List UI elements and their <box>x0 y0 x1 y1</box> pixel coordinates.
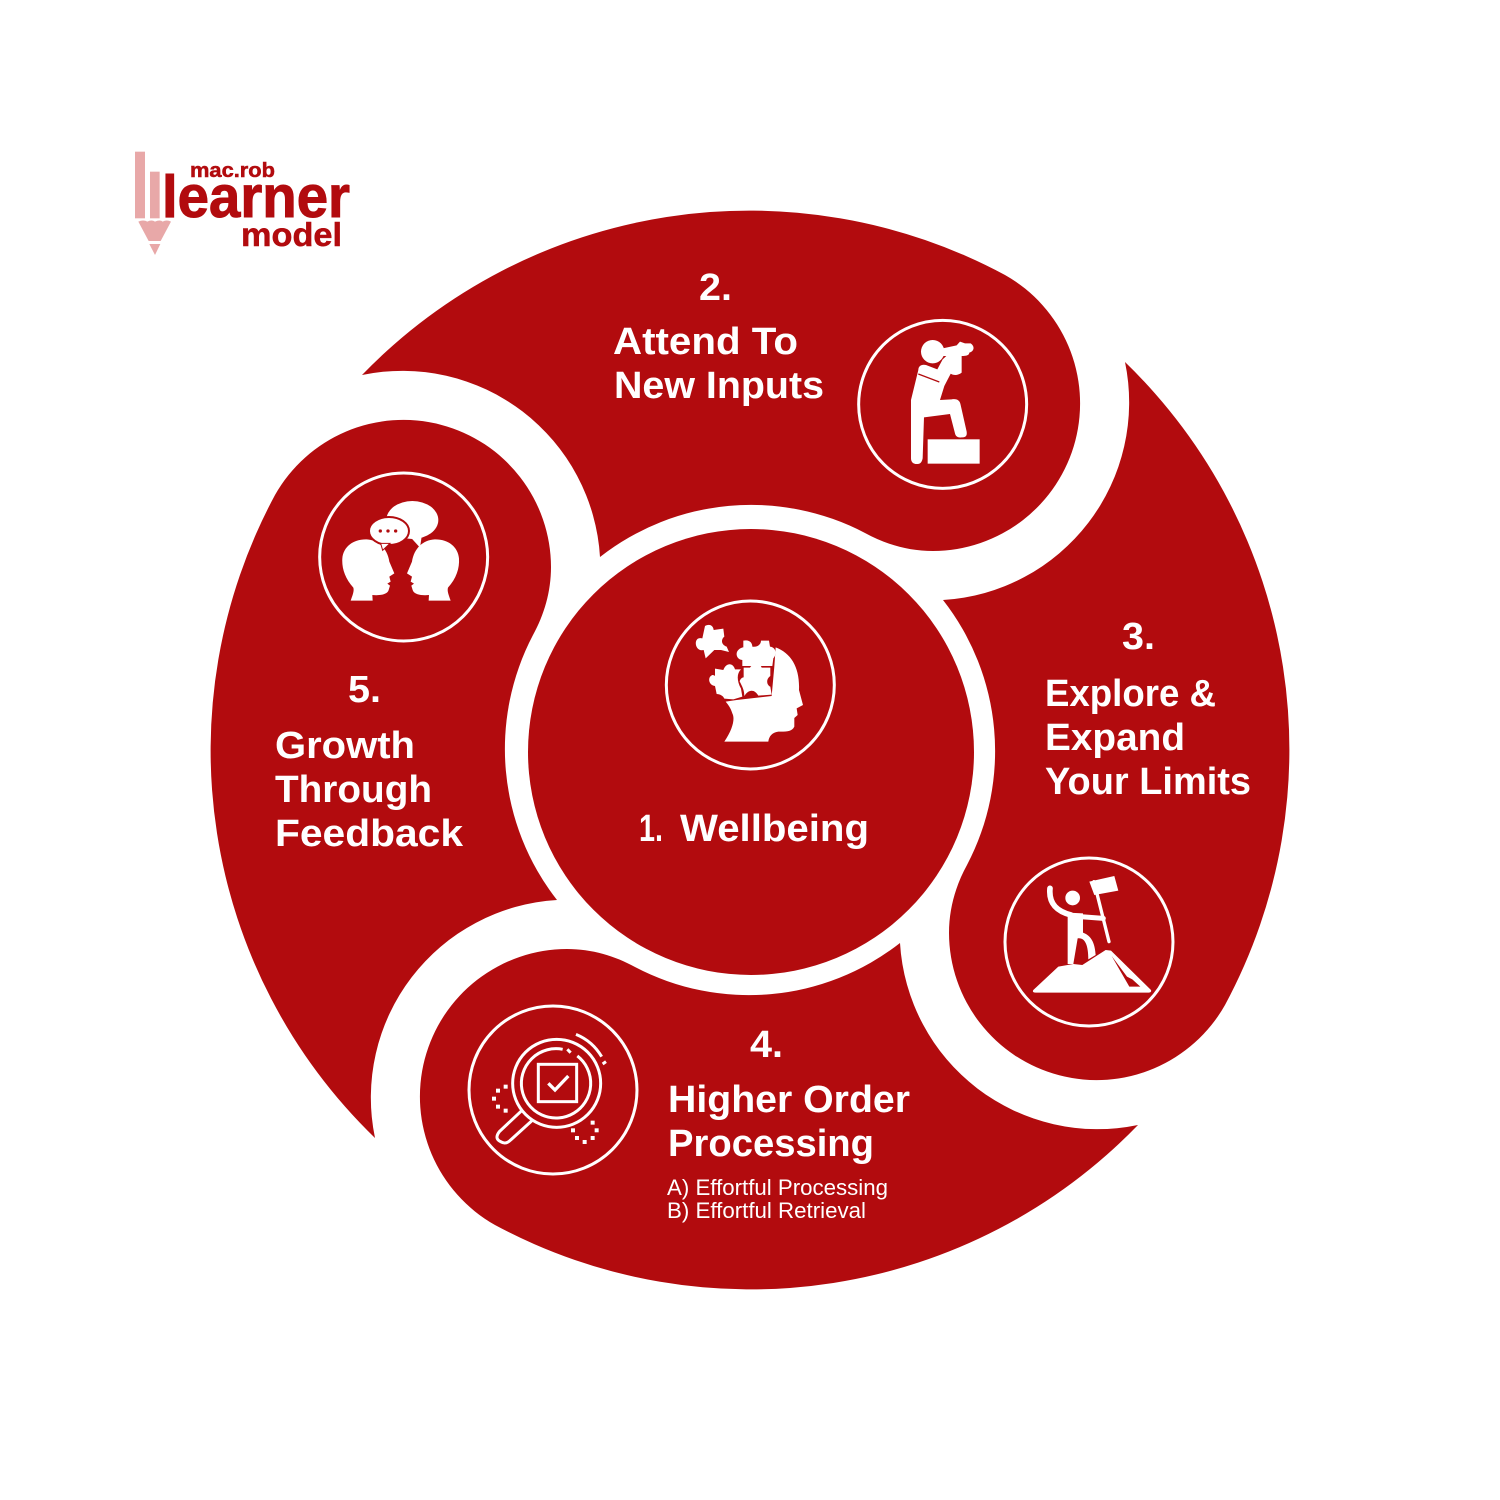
number 5: 5. <box>348 669 381 711</box>
number 1: 1. <box>639 808 663 850</box>
panel 1 shape: central circle <box>528 529 974 975</box>
panel 2 text <box>613 267 824 407</box>
panel 4 text <box>667 1024 910 1223</box>
heading feedback: Feedback <box>275 813 464 855</box>
panel 5 text <box>275 669 464 855</box>
heading explore: Explore & <box>1045 673 1216 715</box>
logo: mac.rob learner model <box>135 152 350 255</box>
logo text: model: model <box>241 216 342 253</box>
heading through: Through <box>275 769 432 811</box>
panel 4 shape: higher order processing <box>420 943 1138 1289</box>
panel 1 text: wellbeing <box>639 808 869 850</box>
logo text: mac.rob: mac.rob <box>190 160 275 182</box>
icon: two heads talking <box>320 473 488 641</box>
icon: head with puzzle pieces <box>666 601 834 769</box>
number 2: 2. <box>699 267 732 309</box>
heading growth: Growth <box>275 725 415 767</box>
icon: magnifying glass with checkbox <box>469 1006 637 1174</box>
subitem effortful processing: A) Effortful Processing <box>667 1175 888 1200</box>
number 3: 3. <box>1122 616 1155 658</box>
panel 2 shape: attend to new inputs <box>362 211 1080 557</box>
panel 5 shape: growth through feedback <box>211 420 557 1138</box>
logo text: learner: learner <box>162 164 350 230</box>
number 4: 4. <box>750 1024 783 1066</box>
logo pencil icon <box>135 152 171 255</box>
heading processing: Processing <box>668 1123 874 1165</box>
heading your limits: Your Limits <box>1045 761 1251 803</box>
icon: person with binoculars <box>859 320 1027 488</box>
subitem effortful retrieval: B) Effortful Retrieval <box>667 1198 866 1223</box>
panel 3 text <box>1045 616 1251 803</box>
heading wellbeing: Wellbeing <box>680 808 869 850</box>
heading attend to: Attend To <box>613 321 798 363</box>
panel 3 shape: explore and expand <box>943 362 1289 1080</box>
icon: climber with flag on mountain <box>1005 858 1173 1026</box>
heading new inputs: New Inputs <box>614 365 824 407</box>
heading higher order: Higher Order <box>668 1079 910 1121</box>
heading expand: Expand <box>1045 717 1185 759</box>
